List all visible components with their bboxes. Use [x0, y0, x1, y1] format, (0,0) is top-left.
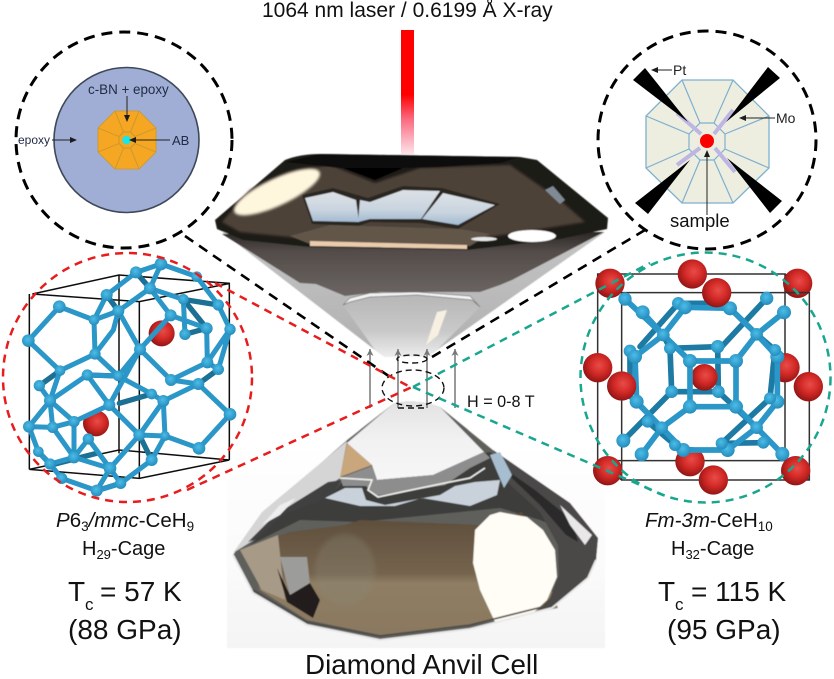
brown lower facet — [250, 512, 558, 635]
back bonds — [623, 298, 775, 445]
Mo electrodes — [677, 110, 735, 172]
inset: electrical probe layout — [633, 62, 796, 231]
peach stripe — [310, 241, 467, 249]
unit cell box — [29, 275, 230, 478]
pressure: 88 GPa: (88 GPa) — [68, 614, 182, 645]
left chrome edge — [233, 441, 347, 553]
lower diamond body — [233, 402, 598, 640]
lower diamond backdrop — [227, 430, 605, 648]
label: epoxy: epoxy — [18, 133, 50, 147]
brown interior of crown — [222, 165, 585, 240]
label: Mo: Mo — [776, 110, 796, 126]
back bonds — [38, 272, 218, 491]
dashed circle: CeH9 — [3, 253, 252, 502]
bottom rim — [233, 555, 596, 640]
pressure: 95 GPa: (95 GPa) — [667, 614, 781, 645]
dashed lines: CeH10 to sample — [413, 263, 668, 497]
back Ce atoms — [583, 259, 812, 476]
octagon spokes — [98, 111, 156, 169]
upper cone — [222, 232, 605, 357]
hydrogen atoms — [22, 258, 236, 497]
bright ellipse highlight — [229, 160, 325, 224]
hydrogen atoms — [616, 292, 791, 461]
front bonds — [625, 299, 784, 454]
front unit cell box — [622, 293, 809, 480]
crystal structure: Fm-3m CeH10 — [583, 259, 823, 495]
magnetic field arrows — [370, 349, 455, 408]
sample dot — [700, 134, 714, 148]
label: sample: sample — [670, 210, 730, 231]
caption: H32-Cage: -Cage — [700, 538, 754, 560]
AB center dot — [122, 136, 131, 144]
caption: H29-Cage: 29 — [96, 547, 111, 562]
window frame — [302, 186, 500, 229]
caption: H29-Cage: -Cage — [111, 538, 165, 560]
top black reflection — [343, 168, 403, 180]
Tc value: 115 K: c — [675, 595, 684, 614]
top dark band — [285, 154, 520, 168]
metal band — [222, 232, 604, 296]
arrows — [52, 96, 170, 140]
lens highlight — [426, 310, 447, 345]
caption: P63/mmc-CeH9: /mmc — [87, 509, 139, 532]
dark left reflection — [277, 568, 320, 618]
culet lens — [343, 292, 480, 357]
label: Pt: Pt — [673, 62, 686, 78]
caption: P63/mmc-CeH9: P6 — [56, 509, 81, 532]
caption: P63/mmc-CeH9: 9 — [187, 519, 194, 534]
image: lower diamond anvil — [227, 402, 605, 648]
caption: Fm-3m-CeH10: 10 — [758, 519, 773, 534]
right chrome edge — [493, 450, 598, 613]
right highlights — [471, 186, 565, 242]
dark chrome band — [250, 452, 588, 545]
dashed circle: probe inset — [598, 31, 816, 249]
dashed lines: CeH9 to sample — [187, 283, 412, 490]
jagged reflection band — [325, 480, 500, 506]
Ce atoms — [83, 320, 175, 436]
epoxy disc — [54, 68, 199, 212]
speckled patch — [315, 534, 375, 606]
Tc value: 57 K: T — [68, 576, 85, 607]
label: c-BN + epoxy: c-BN + epoxy — [88, 82, 169, 97]
caption: P63/mmc-CeH9: -CeH — [139, 509, 187, 532]
label: AB: AB — [172, 133, 189, 148]
caption: Fm-3m-CeH10: Fm-3m-CeH — [645, 509, 758, 532]
image: upper diamond anvil — [215, 154, 608, 357]
Tc value: 115 K: T — [658, 576, 675, 607]
front Ce atoms — [593, 278, 823, 495]
caption: H32-Cage: H — [671, 538, 685, 560]
caption: H29-Cage: H — [82, 538, 96, 560]
caption: P63/mmc-CeH9: 3 — [81, 519, 89, 534]
top cap of lower diamond — [347, 402, 484, 480]
bright highlight — [473, 512, 557, 622]
dashed circle: CeH10 — [580, 252, 830, 502]
inset: sample assembly (c-BN, epoxy, AB) — [18, 68, 199, 212]
ceiling band — [290, 225, 490, 246]
window reflections — [305, 192, 359, 222]
arrows — [652, 70, 775, 215]
crystal structure: P63/mmc CeH9 — [22, 258, 236, 497]
tan reflection beside cap — [340, 443, 372, 477]
center Ce atom — [691, 364, 718, 391]
Tc value: 57 K: c — [85, 595, 94, 614]
dashed lines: black insets to culet — [185, 230, 645, 379]
front bonds — [28, 264, 230, 491]
Tc value: 115 K: = 115 K — [691, 576, 787, 607]
label: magnetic field: H = 0-8 T — [467, 393, 535, 411]
chrome crown — [215, 154, 608, 250]
back unit cell box — [598, 274, 809, 480]
grey reflection — [280, 557, 310, 595]
tan left facet — [240, 535, 285, 600]
Tc value: 57 K: = 57 K — [100, 576, 182, 607]
Pt probes — [633, 67, 782, 214]
laser beam — [401, 30, 414, 154]
dashed circle: sample assembly inset — [16, 32, 232, 248]
facet lines — [646, 80, 769, 203]
caption: H32-Cage: 32 — [685, 547, 700, 562]
culet octagon — [646, 80, 769, 203]
gasket octagon — [98, 111, 156, 169]
gasket and sample dashed outlines — [382, 355, 444, 408]
